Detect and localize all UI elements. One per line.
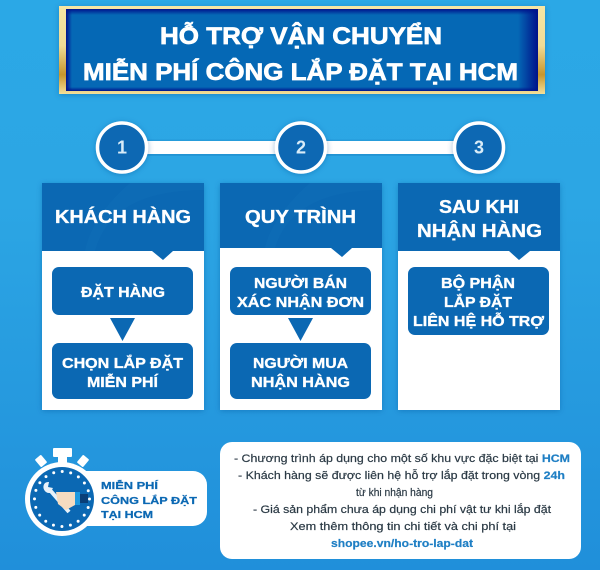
box: người bán xác nhận đơn: NGƯỜI BÁN (254, 274, 347, 292)
box: đặt hàng (52, 267, 193, 315)
note line 1: - Chương trình áp dụng cho một số khu vực đặc biệt tại HCM (234, 453, 570, 465)
box: người mua nhận hàng: NHẬN HÀNG (251, 373, 350, 391)
box: đặt hàng: ĐẶT HÀNG (81, 284, 165, 301)
badge text: MIỄN PHÍ (101, 479, 159, 492)
box: bộ phận lắp đặt (408, 267, 549, 335)
box: chọn lắp đặt: CHỌN LẮP ĐẶT (62, 354, 183, 372)
arrow down (110, 318, 135, 341)
panel: khách hàng (42, 183, 204, 410)
box: bộ phận lắp đặt: BỘ PHẬN (441, 274, 515, 292)
box: người mua nhận hàng: NGƯỜI MUA (253, 354, 348, 372)
box: chọn lắp đặt: MIỄN PHÍ (87, 374, 159, 391)
panel heading: NHẬN HÀNG (417, 220, 542, 241)
box: bộ phận lắp đặt: LIÊN HỆ HỖ TRỢ (413, 312, 544, 330)
title banner (59, 6, 545, 94)
step 2 marker (276, 123, 326, 172)
badge: miễn phí công lắp đặt (25, 448, 207, 536)
panel: sau khi nhận hàng (398, 183, 560, 410)
step 3 marker: 3 (474, 138, 484, 158)
note link: shopee.vn/ho-tro-lap-dat (331, 538, 473, 550)
title line 2: MIỄN PHÍ CÔNG LẮP ĐẶT TẠI HCM (83, 57, 518, 86)
box: bộ phận lắp đặt: LẮP ĐẶT (444, 293, 512, 311)
badge text: CÔNG LẮP ĐẶT (101, 494, 198, 507)
icon: stopwatch (25, 448, 99, 536)
note line 2: - Khách hàng sẽ được liên hệ hỗ trợ lắp đặt trong vòng 24h (238, 469, 565, 482)
note line 4: - Giá sản phẩm chưa áp dụng chi phí vật tư khi lắp đặt (253, 503, 551, 516)
box: người mua nhận hàng (230, 343, 371, 399)
panel heading: SAU KHI (439, 196, 519, 217)
step timeline (98, 123, 504, 172)
box: chọn lắp đặt (52, 343, 193, 399)
step 2 marker: 2 (296, 138, 306, 158)
panel: quy trình (220, 183, 382, 410)
note line 3: từ khi nhận hàng (356, 487, 433, 499)
note line 5: Xem thêm thông tin chi tiết và chi phí tại (290, 521, 516, 533)
step 3 marker (454, 123, 504, 172)
step 1 marker (98, 123, 146, 172)
step 1 marker: 1 (117, 138, 127, 158)
box: người bán xác nhận đơn: XÁC NHẬN ĐƠN (237, 293, 364, 311)
panel heading: QUY TRÌNH (245, 206, 356, 227)
notes panel (220, 442, 581, 559)
panel heading: KHÁCH HÀNG (55, 206, 191, 227)
arrow down (288, 318, 313, 341)
badge text: TẠI HCM (101, 509, 153, 521)
badge text (101, 479, 198, 521)
title line 1: HỖ TRỢ VẬN CHUYỂN (160, 21, 442, 50)
panel heading (417, 196, 542, 241)
box: người bán xác nhận đơn (230, 267, 371, 315)
